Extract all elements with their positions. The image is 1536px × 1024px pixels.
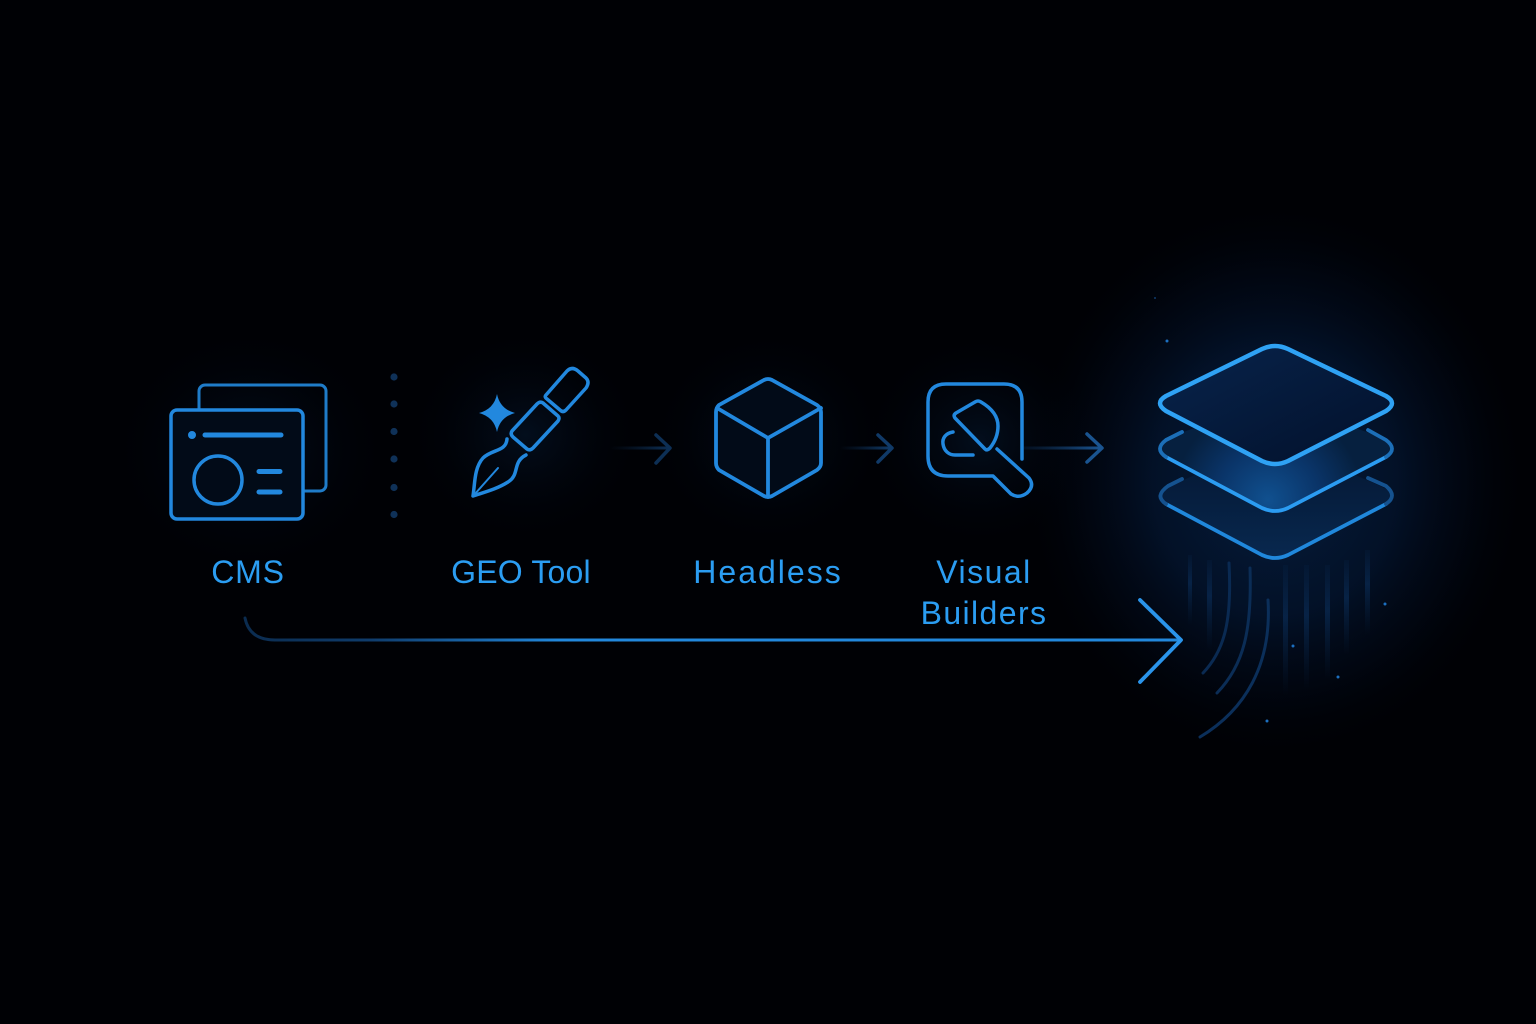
icon: CMS windows: [171, 385, 326, 519]
label: Visual Builders: Builders: [921, 595, 1047, 631]
layer stack: [1158, 346, 1393, 558]
icon: visual builder: [928, 384, 1032, 496]
particles: [1154, 297, 1386, 722]
layer: top: [1160, 346, 1392, 464]
icon: headless cube: [716, 379, 821, 497]
label: CMS: CMS: [211, 554, 285, 590]
light streams beneath stack: [1188, 550, 1370, 737]
label: GEO Tool: GEO Tool: [451, 554, 591, 590]
layer: bottom: [1158, 440, 1393, 558]
glow behind layer stack: [1030, 210, 1520, 750]
glow behind icons: [120, 335, 1090, 565]
arrow: Visual Builders to layer stack: [1024, 434, 1102, 462]
dotted divider: [390, 373, 398, 518]
arrow: GEO tool to Headless: [610, 435, 670, 463]
layer: middle: [1158, 400, 1393, 511]
icon: GEO tool pen: [473, 368, 588, 496]
label: Visual Builders: [921, 554, 1047, 631]
arrow: Headless to Visual Builders: [840, 435, 892, 462]
label: Headless: Headless: [693, 554, 843, 590]
long progress arrow: [245, 600, 1181, 682]
label: Visual Builders: Visual: [936, 554, 1032, 590]
